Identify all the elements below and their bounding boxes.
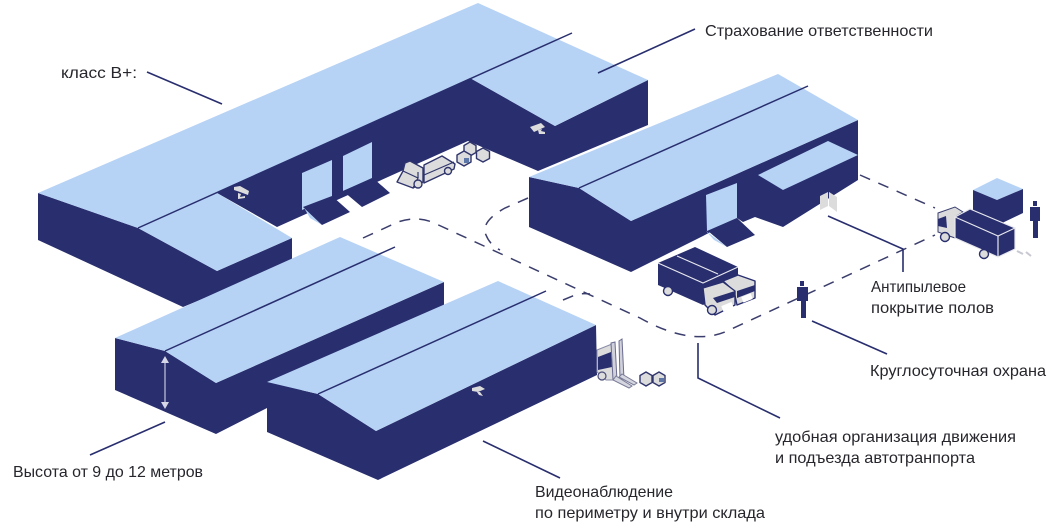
door and ramp 2 [343, 142, 390, 207]
height arrow [161, 356, 169, 409]
forklift with boxes [597, 339, 665, 388]
callout: height: Высота от 9 до 12 метров [13, 464, 203, 481]
callout: video surveillance: Видеонаблюдение [535, 484, 673, 501]
icon: guard figure centre [797, 281, 808, 318]
two parked trucks [658, 247, 755, 315]
callout: traffic organisation: удобная организация движения [775, 429, 1016, 446]
callout: class: класс В+: [61, 65, 137, 82]
building: lower middle warehouse [267, 281, 597, 480]
delivery truck with boxes [397, 142, 490, 188]
icon: camera [234, 186, 249, 199]
side door [820, 192, 837, 212]
callout: liability insurance: Страхование ответственности [705, 23, 933, 40]
callout: traffic organisation [698, 343, 1016, 467]
large truck and cargo box [938, 178, 1031, 258]
icon: camera [530, 123, 545, 134]
callout: liability insurance [598, 23, 933, 73]
callout: video surveillance: по периметру и внутри склада [535, 505, 765, 522]
icon: camera [472, 386, 485, 396]
side wing roof [758, 141, 858, 190]
door and ramp 1 [302, 160, 350, 225]
callout: security: Круглосуточная охрана [870, 363, 1046, 380]
callout: security [812, 321, 1046, 380]
callout: height [13, 422, 203, 481]
callout: class [61, 65, 222, 104]
callout: traffic organisation: и подъезда автотранпорта [775, 450, 975, 467]
building: large warehouse [38, 3, 648, 307]
icon: guard figure right [1030, 201, 1040, 238]
callout: anti-dust floor: Антипылевое [871, 279, 966, 296]
building: centre right warehouse [529, 74, 858, 272]
door and ramp [706, 183, 755, 247]
building: lower left warehouse [115, 237, 444, 434]
dashed traffic routes [363, 175, 935, 337]
callout: anti-dust floor [828, 216, 994, 317]
callout: video surveillance [483, 441, 765, 522]
callout: anti-dust floor: покрытие полов [871, 300, 994, 317]
